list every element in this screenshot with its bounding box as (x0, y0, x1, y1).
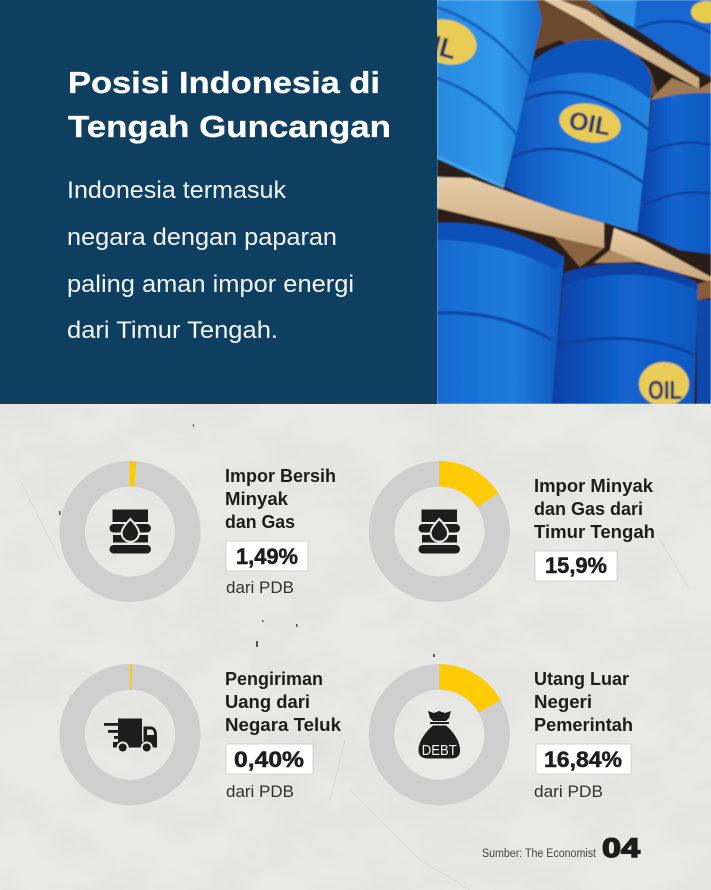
label: impor bersih: 1,49% (236, 544, 298, 569)
label: pengiriman uang: dari PDB (226, 783, 294, 801)
label: pengiriman uang: 0,40% (234, 747, 304, 772)
barrel top centre (587, 0, 637, 28)
barrel bottom right (552, 264, 698, 404)
label: utang luar negeri: Negeri (534, 692, 592, 712)
pallet top (544, 0, 699, 89)
label: impor minyak timur tengah: Timur Tengah (534, 522, 655, 542)
label: utang luar negeri: Utang Luar (534, 669, 629, 689)
barrel label OIL lower: OIL (648, 375, 682, 405)
barrel right middle (637, 93, 711, 254)
label: impor bersih: dan Gas (225, 512, 295, 532)
barrel left top (437, 0, 542, 187)
intro text (67, 177, 354, 344)
intro text: dari Timur Tengah. (67, 317, 278, 344)
barrel label IL: IL (429, 30, 460, 65)
pallet lower (554, 235, 604, 267)
source: Sumber: The Economist (482, 848, 597, 860)
icon: delivery truck (104, 718, 157, 752)
donut: impor bersih minyak dan gas 1,49% (72, 474, 188, 589)
label: utang luar negeri: Pemerintah (534, 715, 633, 735)
label: utang luar negeri (534, 669, 633, 801)
label: impor minyak timur tengah: dan Gas dari (534, 499, 643, 519)
label: pengiriman uang: Negara Teluk (225, 715, 342, 735)
label: impor minyak timur tengah: Impor Minyak (534, 476, 654, 496)
label: impor minyak timur tengah: 15,9% (545, 553, 607, 578)
icon: debt money bag: DEBT (422, 742, 457, 759)
intro text: Indonesia termasuk (67, 177, 287, 204)
donut: pengiriman uang dari negara teluk 0,40% (72, 677, 188, 792)
concrete background panel (0, 404, 711, 890)
label: pengiriman uang (225, 669, 342, 801)
page number: 04 (602, 833, 640, 863)
donut: utang luar negeri pemerintah 16,84% (382, 677, 497, 792)
label: impor bersih: dari PDB (226, 579, 294, 597)
label: utang luar negeri: dari PDB (534, 783, 603, 801)
header panel (0, 0, 437, 404)
label: pengiriman uang: Pengiriman (225, 669, 323, 689)
barrel bottom left (437, 223, 564, 404)
title: Tengah Guncangan (68, 109, 391, 144)
icon: oil barrel (418, 510, 460, 554)
icon: debt money bag (418, 711, 460, 759)
title: Posisi Indonesia di (68, 65, 380, 100)
photo: blue oil barrels on wooden pallets (412, 0, 711, 406)
label: impor bersih: Minyak (225, 489, 289, 509)
barrel centre (505, 40, 652, 233)
title (68, 65, 391, 144)
barrel label OIL: OIL (567, 107, 613, 141)
label: pengiriman uang: Uang dari (225, 692, 310, 712)
intro text: negara dengan paparan (67, 224, 337, 251)
icon: oil barrel (110, 510, 151, 554)
label: impor bersih (225, 466, 336, 597)
barrel top right (634, 0, 711, 77)
donut: impor minyak dan gas dari timur tengah 15,9% (382, 474, 497, 589)
label: impor minyak timur tengah (534, 476, 655, 581)
label: impor bersih: Impor Bersih (225, 466, 336, 486)
label: utang luar negeri: 16,84% (544, 747, 622, 772)
intro text: paling aman impor energi (67, 271, 354, 298)
